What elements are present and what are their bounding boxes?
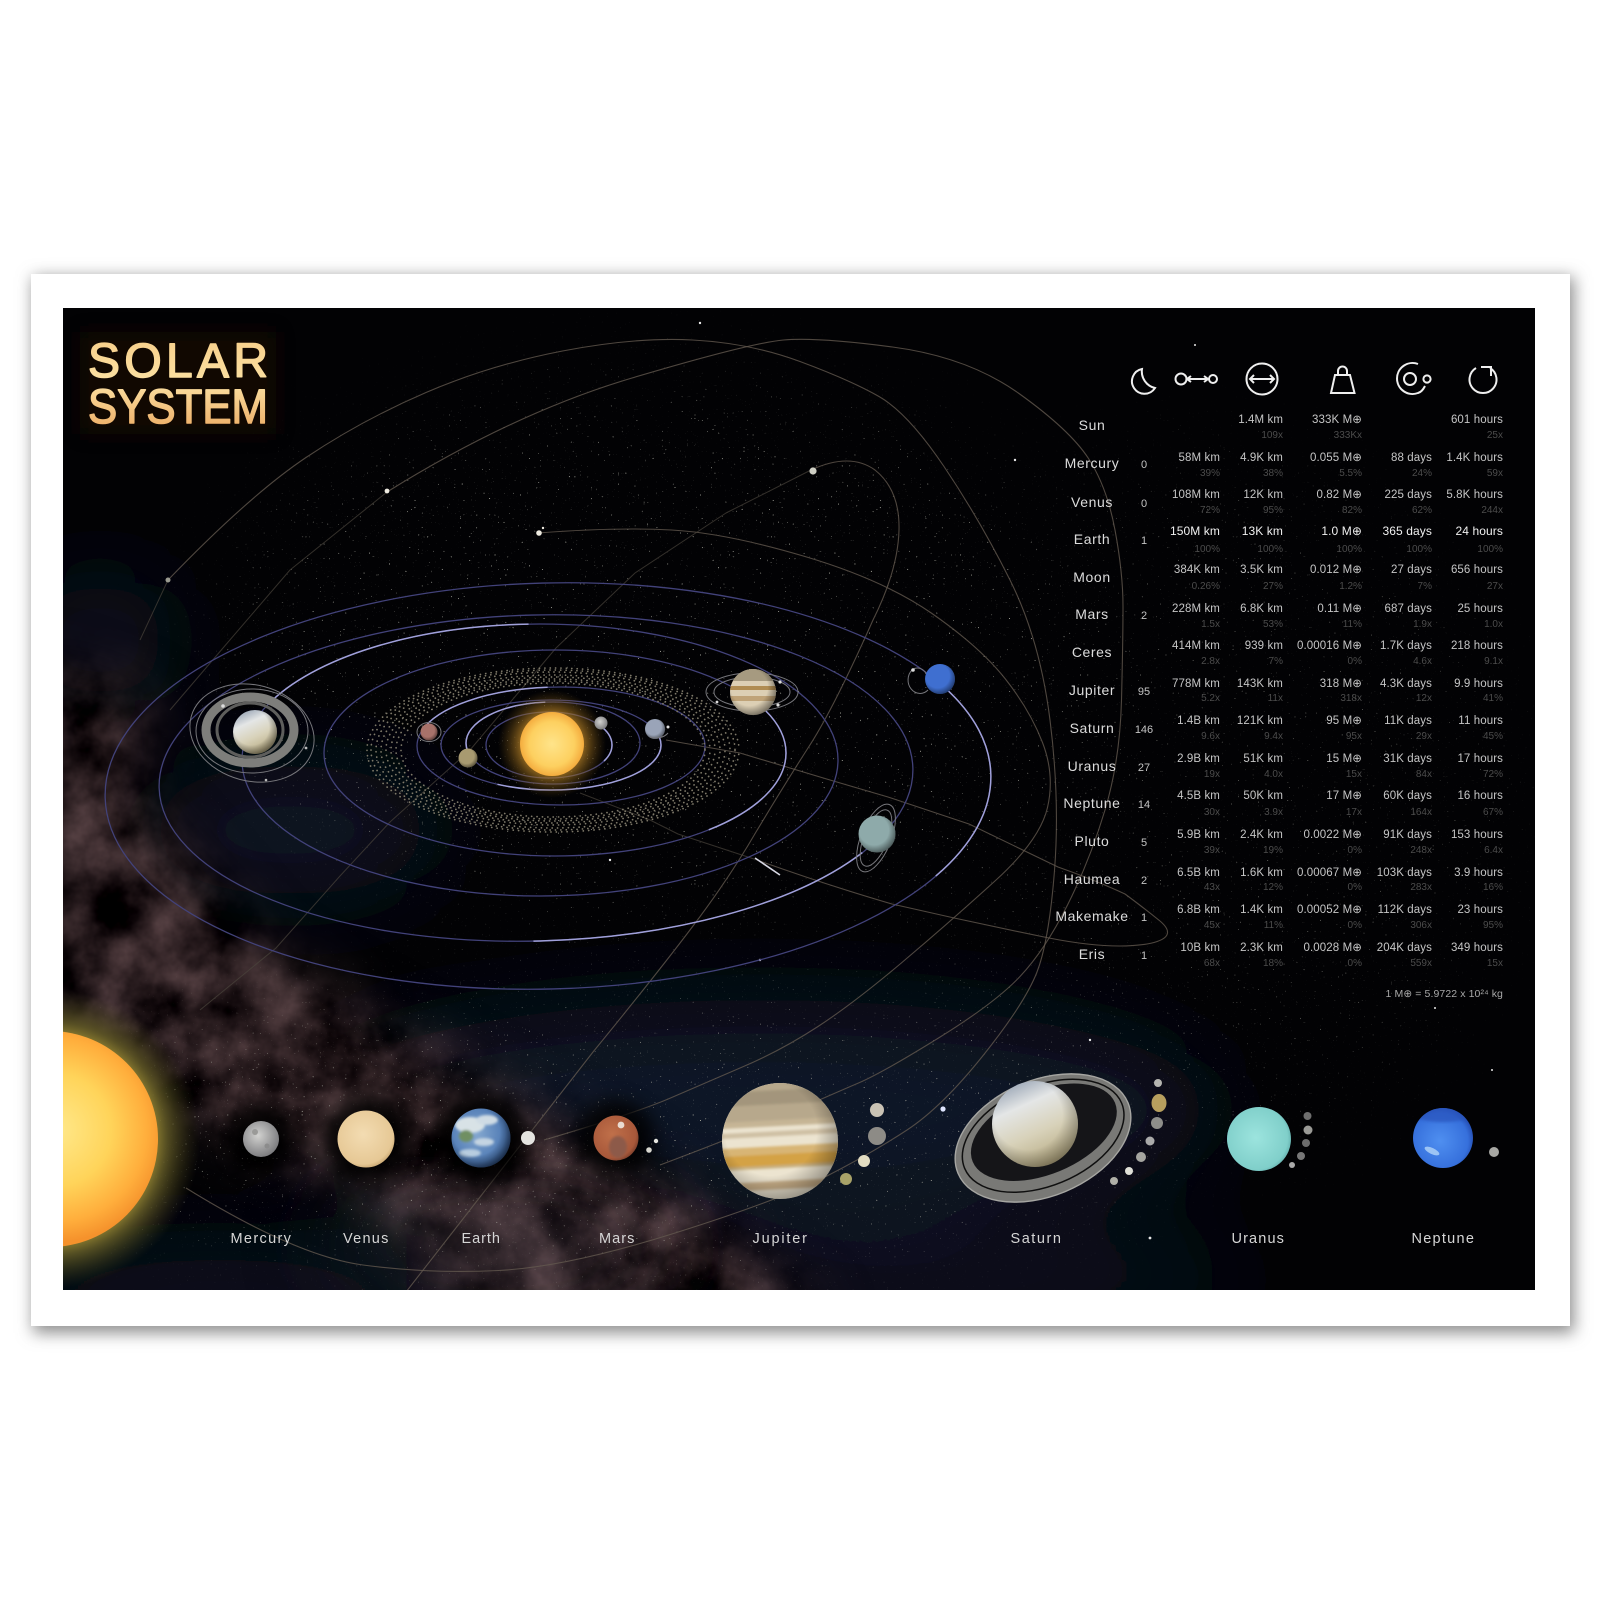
row: Ceres: 7% <box>1269 656 1283 667</box>
row: Venus <box>1071 489 1503 516</box>
row: Earth: 13K km <box>1242 524 1283 538</box>
row: Moon: 1.2% <box>1339 581 1362 592</box>
row: Mars: 25 hours <box>1457 603 1503 615</box>
row: Mars: 53% <box>1263 619 1283 630</box>
row: Jupiter <box>1069 678 1503 704</box>
trail: Uranus <box>155 605 917 951</box>
row: Mercury: 59x <box>1487 468 1503 479</box>
row: Sun: 601 hours <box>1451 414 1503 426</box>
row: Sun: 109x <box>1261 430 1283 441</box>
row: Neptune: 14 <box>1138 799 1150 811</box>
row: Mercury: 39% <box>1200 468 1220 479</box>
orbit: Eris <box>406 461 899 1292</box>
row: Saturn: 9.4x <box>1264 731 1283 742</box>
row: Jupiter: 318 M⊕ <box>1320 678 1362 690</box>
row: Eris: 68x <box>1204 958 1220 969</box>
orbit: Haumea <box>387 339 1123 1165</box>
orbit: Mars <box>417 687 705 805</box>
row: Uranus <box>1068 753 1503 780</box>
dwarf planet orbits <box>140 339 1168 1292</box>
row: Haumea: 103K days <box>1377 867 1432 879</box>
row: Eris: 18% <box>1263 958 1283 969</box>
row: Earth: 100% <box>1406 544 1432 555</box>
table footnote: 1 M⊕ = 5.9722 x 10²⁴ kg <box>1386 988 1503 1000</box>
row: Haumea: 43x <box>1204 882 1220 893</box>
row: Earth: Earth <box>1074 531 1110 547</box>
row: Mercury: 38% <box>1263 468 1283 479</box>
row: Neptune: 50K km <box>1243 790 1283 802</box>
row: Eris: 559x <box>1410 958 1432 969</box>
row: Haumea: Haumea <box>1064 871 1120 887</box>
planet: Mercury <box>243 1121 279 1157</box>
card shadow <box>33 277 1574 1333</box>
row: Eris: 349 hours <box>1451 942 1503 954</box>
planet labels: Uranus <box>1232 1231 1284 1247</box>
icon: mass <box>1331 366 1354 393</box>
row: Venus: 82% <box>1342 505 1362 516</box>
row: Moon: 656 hours <box>1451 564 1503 576</box>
row: Earth: 100% <box>1477 544 1503 555</box>
row: Haumea: 0.00067 M⊕ <box>1297 867 1362 879</box>
row: Haumea: 12% <box>1263 882 1283 893</box>
row: Pluto: 248x <box>1410 845 1432 856</box>
planet: Earth <box>452 1108 510 1168</box>
row: Jupiter: 4.3K days <box>1380 678 1432 690</box>
row: Haumea: 283x <box>1410 882 1432 893</box>
row: Moon: 27x <box>1487 581 1503 592</box>
row: Moon: 27% <box>1263 581 1283 592</box>
row: Earth: 100% <box>1194 544 1220 555</box>
row: Eris: Eris <box>1079 946 1105 962</box>
orbit: Neptune <box>100 571 996 1001</box>
trail: Jupiter <box>324 650 786 856</box>
row: Jupiter: 5.2x <box>1201 693 1220 704</box>
row: Venus: 72% <box>1200 505 1220 516</box>
orbit: faint extensions <box>140 470 811 1010</box>
orbit: Jupiter <box>324 650 786 856</box>
row: Ceres: 218 hours <box>1451 640 1503 652</box>
milky way glow <box>330 1205 670 1285</box>
row: Venus: Venus <box>1071 494 1113 510</box>
bright stars <box>609 322 1493 1239</box>
row: Makemake: 6.8B km <box>1177 904 1220 916</box>
row: Mercury: 0 <box>1141 459 1147 471</box>
row: Ceres: 4.6x <box>1413 656 1432 667</box>
mini Neptune <box>908 664 955 694</box>
row: Mercury: 5.5% <box>1339 468 1362 479</box>
row: Neptune: 17x <box>1346 807 1362 818</box>
row: Mercury <box>1065 452 1503 479</box>
row: Makemake: 0% <box>1348 920 1362 931</box>
row: Pluto: 6.4x <box>1484 845 1503 856</box>
row: Uranus: 4.0x <box>1264 769 1283 780</box>
row: Mars: 6.8K km <box>1240 603 1283 615</box>
row: Mars: 1.9x <box>1413 619 1432 630</box>
row: Mercury: 24% <box>1412 468 1432 479</box>
planet: Mars with moons <box>594 1116 658 1160</box>
row: Makemake: 95% <box>1483 920 1503 931</box>
row: Saturn: 11K days <box>1384 715 1432 727</box>
row: Sun: Sun <box>1079 417 1105 433</box>
white card <box>31 274 1570 1326</box>
row: Earth <box>1074 524 1503 555</box>
trail: Earth <box>441 700 661 790</box>
row: Saturn: Saturn <box>1070 720 1114 736</box>
icon: moons <box>1132 369 1155 394</box>
row: Eris <box>1079 942 1503 969</box>
dark halos behind planets <box>229 1092 654 1184</box>
row: Makemake <box>1055 904 1503 931</box>
row: Mars: 228M km <box>1172 603 1220 615</box>
row: Makemake: 306x <box>1410 920 1432 931</box>
large Sun <box>0 989 200 1289</box>
row: Mars: 1.5x <box>1201 619 1220 630</box>
row: Mercury: 58M km <box>1178 452 1220 464</box>
row: Eris: 204K days <box>1377 942 1432 954</box>
trail: Neptune <box>100 571 996 1001</box>
planet labels: Mars <box>599 1231 635 1247</box>
orbit: Makemake <box>538 529 1050 1140</box>
row: Uranus: 84x <box>1416 769 1432 780</box>
row: Moon: 27 days <box>1391 564 1432 576</box>
row: Earth: 365 days <box>1382 524 1432 538</box>
row: Uranus: 19x <box>1204 769 1220 780</box>
row: Ceres: 0.00016 M⊕ <box>1297 640 1362 652</box>
poster artwork panel <box>0 308 1535 1345</box>
planet labels: Jupiter <box>752 1231 808 1247</box>
icon: orbit <box>1397 363 1431 394</box>
planet orbits <box>100 571 996 1001</box>
row: Uranus: 15x <box>1346 769 1362 780</box>
row: Ceres: 414M km <box>1172 640 1220 652</box>
row: Jupiter: 318x <box>1340 693 1362 704</box>
row: Earth: 100% <box>1257 544 1283 555</box>
title: SOLAR <box>88 335 268 388</box>
row: Mars: 1.0x <box>1484 619 1503 630</box>
row: Moon: Moon <box>1073 569 1111 585</box>
planet labels: Mercury <box>230 1231 292 1247</box>
row: Pluto <box>1075 829 1503 856</box>
row: Jupiter: 143K km <box>1237 678 1283 690</box>
row: Pluto: 2.4K km <box>1240 829 1283 841</box>
planet: Neptune with moon <box>1413 1106 1499 1168</box>
row: Saturn: 121K km <box>1237 715 1283 727</box>
row: Makemake: 45x <box>1204 920 1220 931</box>
row: Venus: 5.8K hours <box>1446 489 1503 501</box>
row: Venus: 62% <box>1412 505 1432 516</box>
planet labels: Earth <box>462 1231 500 1247</box>
row: Sun <box>1079 414 1503 441</box>
row: Saturn: 9.6x <box>1201 731 1220 742</box>
row: Neptune <box>1063 790 1503 818</box>
row: Haumea: 16% <box>1483 882 1503 893</box>
trail: Mars <box>417 687 705 805</box>
orbit: Earth <box>441 700 661 790</box>
row: Uranus: 31K days <box>1383 753 1432 765</box>
row: Earth: 1.0 M⊕ <box>1321 524 1362 538</box>
row: Pluto: 91K days <box>1383 829 1432 841</box>
row: Mercury: 0.055 M⊕ <box>1310 452 1362 464</box>
row: Pluto: 39x <box>1204 845 1220 856</box>
row: Ceres: Ceres <box>1072 644 1112 660</box>
row: Moon: 7% <box>1418 581 1432 592</box>
dwarf planet markers <box>166 467 817 875</box>
row: Mars <box>1075 603 1503 630</box>
trail: Saturn <box>242 624 838 896</box>
row: Venus: 225 days <box>1385 489 1432 501</box>
orbit: Pluto <box>168 339 1056 1271</box>
title: SYSTEM <box>88 381 268 434</box>
row: Mars: 2 <box>1141 610 1147 622</box>
row: Pluto: 0% <box>1348 845 1362 856</box>
trail: Venus <box>466 702 640 784</box>
row: Jupiter: 12x <box>1416 693 1432 704</box>
row: Mars: 11% <box>1343 619 1362 630</box>
planet: Uranus with moons <box>1227 1107 1312 1171</box>
row: Neptune: 16 hours <box>1457 790 1503 802</box>
row: Uranus: 51K km <box>1243 753 1283 765</box>
orbit trails <box>268 623 992 942</box>
row: Mercury: 88 days <box>1391 452 1432 464</box>
star field <box>40 390 1500 1260</box>
row: Haumea: 3.9 hours <box>1454 867 1503 879</box>
row: Eris: 10B km <box>1180 942 1220 954</box>
row: Jupiter: 41% <box>1483 693 1503 704</box>
row: Neptune: 3.9x <box>1264 807 1283 818</box>
row: Mercury: Mercury <box>1065 455 1119 471</box>
row: Moon: 0.26% <box>1192 581 1220 592</box>
row: Ceres: 939 km <box>1245 640 1283 652</box>
planet: Saturn with rings and moons <box>936 1049 1166 1227</box>
row: Uranus: 72% <box>1483 769 1503 780</box>
row: Mars: 687 days <box>1385 603 1432 615</box>
mini Jupiter with moons <box>706 668 798 715</box>
row: Pluto: 5 <box>1141 837 1147 849</box>
row: Makemake: 0.00052 M⊕ <box>1297 904 1362 916</box>
Moon <box>521 1131 535 1145</box>
row: Makemake: 11% <box>1264 920 1283 931</box>
row: Makemake: 1.4K km <box>1240 904 1283 916</box>
orbit: thin ellipse inner <box>580 793 757 860</box>
asteroid belt <box>367 668 739 832</box>
row: Ceres: 9.1x <box>1484 656 1503 667</box>
row: Uranus: 15 M⊕ <box>1326 753 1362 765</box>
planet labels <box>230 1231 1474 1247</box>
data table <box>1055 414 1503 1000</box>
row: Jupiter: 11x <box>1268 693 1283 704</box>
row: Uranus: Uranus <box>1068 758 1116 774</box>
icon: rotation <box>1470 367 1496 393</box>
row: Ceres: 0% <box>1348 656 1362 667</box>
mini Mars <box>417 722 441 742</box>
central sun <box>498 690 606 798</box>
planet: Venus <box>338 1110 394 1168</box>
row: Venus: 12K km <box>1243 489 1283 501</box>
row: Sun: 333Kx <box>1334 430 1362 441</box>
row: Ceres <box>1072 640 1503 667</box>
row: Saturn <box>1070 715 1503 742</box>
row: Saturn: 29x <box>1416 731 1432 742</box>
navy sky glow <box>63 572 1218 1290</box>
planet labels: Saturn <box>1010 1231 1062 1247</box>
row: Uranus: 27 <box>1138 762 1150 774</box>
row: Saturn: 95 M⊕ <box>1326 715 1362 727</box>
row: Jupiter: 778M km <box>1172 678 1220 690</box>
orbit: thin ellipse <box>666 740 1168 946</box>
row: Saturn: 45% <box>1483 731 1503 742</box>
milky way band <box>63 664 788 1290</box>
space background <box>63 308 1535 1290</box>
row: Venus: 108M km <box>1172 489 1220 501</box>
title <box>80 332 276 434</box>
row: Pluto: 5.9B km <box>1177 829 1220 841</box>
mini Saturn with rings <box>179 670 325 796</box>
row: Jupiter: Jupiter <box>1069 682 1115 698</box>
row: Mercury: 1.4K hours <box>1446 452 1503 464</box>
row: Saturn: 1.4B km <box>1177 715 1220 727</box>
row: Eris: 1 <box>1141 950 1147 962</box>
row: Eris: 2.3K km <box>1240 942 1283 954</box>
row: Ceres: 2.8x <box>1201 656 1220 667</box>
row: Earth: 100% <box>1336 544 1362 555</box>
row: Sun: 25x <box>1487 430 1503 441</box>
row: Haumea: 0% <box>1348 882 1362 893</box>
mini Earth <box>645 719 670 739</box>
orbit: Uranus <box>155 605 917 951</box>
row: Makemake: 1 <box>1141 912 1147 924</box>
orbit: Mercury <box>486 712 612 778</box>
row: Haumea: 2 <box>1141 875 1147 887</box>
mini Uranus with rings <box>849 799 903 877</box>
planet: Jupiter with moons <box>712 1077 886 1199</box>
row: Saturn: 95x <box>1346 731 1362 742</box>
row: Sun: 1.4M km <box>1238 414 1283 426</box>
poster canvas <box>22 266 1585 1344</box>
row: Neptune: 4.5B km <box>1177 790 1220 802</box>
row: Earth: 1 <box>1141 535 1147 547</box>
row: Pluto: 19% <box>1263 845 1283 856</box>
trail: Mercury <box>486 712 612 778</box>
row: Mars: 0.11 M⊕ <box>1317 603 1362 615</box>
row: Earth: 24 hours <box>1456 524 1503 538</box>
row: Saturn: 146 <box>1135 724 1153 736</box>
row: Neptune: 30x <box>1204 807 1220 818</box>
row: Venus: 244x <box>1481 505 1503 516</box>
row: Pluto: 0.0022 M⊕ <box>1304 829 1362 841</box>
row: Haumea: 1.6K km <box>1240 867 1283 879</box>
mini Venus <box>458 748 478 768</box>
row: Pluto: 153 hours <box>1451 829 1503 841</box>
row: Uranus: 2.9B km <box>1177 753 1220 765</box>
row: Jupiter: 9.9 hours <box>1454 678 1503 690</box>
row: Eris: 0% <box>1348 958 1362 969</box>
row: Makemake: 112K days <box>1378 904 1432 916</box>
row: Venus: 0 <box>1141 498 1147 510</box>
row: Moon <box>1073 564 1503 592</box>
orbit: Venus <box>466 702 640 784</box>
row: Saturn: 11 hours <box>1458 715 1503 727</box>
row: Mars: Mars <box>1075 606 1109 622</box>
row: Neptune: 164x <box>1410 807 1432 818</box>
row: Moon: 3.5K km <box>1240 564 1283 576</box>
row: Eris: 0.0028 M⊕ <box>1304 942 1362 954</box>
row: Pluto: Pluto <box>1075 833 1109 849</box>
row: Eris: 15x <box>1487 958 1503 969</box>
row: Neptune: 60K days <box>1383 790 1432 802</box>
row: Venus: 95% <box>1263 505 1283 516</box>
planet labels: Neptune <box>1412 1231 1474 1247</box>
row: Neptune: 67% <box>1483 807 1503 818</box>
row: Uranus: 17 hours <box>1457 753 1503 765</box>
row: Haumea <box>1064 867 1503 893</box>
row: Haumea: 6.5B km <box>1177 867 1220 879</box>
row: Makemake: 23 hours <box>1457 904 1503 916</box>
orbit: Saturn <box>242 624 838 896</box>
icon: distance <box>1176 374 1217 384</box>
row: Neptune: Neptune <box>1063 795 1121 811</box>
row: Jupiter: 95 <box>1138 686 1150 698</box>
row: Moon: 0.012 M⊕ <box>1310 564 1362 576</box>
table header icons <box>1132 363 1496 394</box>
row: Sun: 333K M⊕ <box>1312 414 1362 426</box>
row: Earth: 150M km <box>1170 524 1220 538</box>
mini Mercury <box>594 716 608 730</box>
icon: diameter <box>1246 364 1278 394</box>
row: Ceres: 1.7K days <box>1380 640 1432 652</box>
row: Neptune: 17 M⊕ <box>1326 790 1362 802</box>
row: Venus: 0.82 M⊕ <box>1316 489 1362 501</box>
row: Makemake: Makemake <box>1055 908 1129 924</box>
row: Moon: 384K km <box>1174 564 1220 576</box>
row: Mercury: 4.9K km <box>1240 452 1283 464</box>
planet labels: Venus <box>343 1231 389 1247</box>
